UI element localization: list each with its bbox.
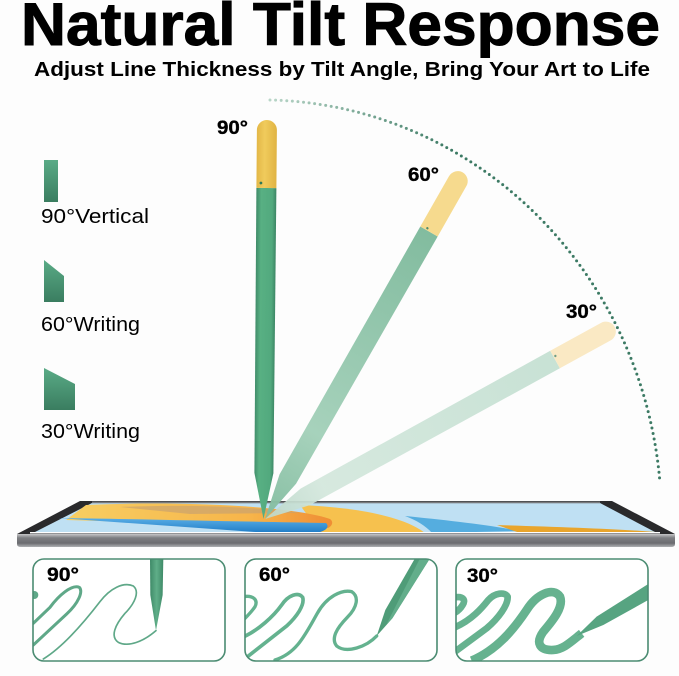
label: 30 writing: 30°Writing [41, 420, 140, 443]
label: 90 vertical: 90°Vertical [41, 205, 149, 228]
label: 90 degrees: 90° [47, 564, 79, 586]
panel: 60 degree stroke sample [243, 558, 437, 661]
angle label 60: 60° [408, 164, 439, 186]
pen at 60 degrees [256, 167, 471, 524]
subtitle: Adjust Line Thickness by Tilt Angle, Bring Your Art to Life [34, 58, 650, 81]
pen at 30 degrees [260, 318, 619, 528]
angle label 90: 90° [217, 117, 248, 139]
icon: 90 degree nib contact [44, 160, 58, 202]
tablet [17, 501, 675, 547]
pen at 90 degrees [254, 120, 277, 519]
dotted angle arc [270, 100, 660, 483]
label: 60 degrees: 60° [259, 564, 290, 586]
legend: nib shapes [41, 160, 149, 443]
panel: 30 degree stroke sample [455, 559, 648, 661]
label: 60 writing: 60°Writing [41, 313, 140, 336]
panel: 90 degree stroke sample [30, 558, 225, 661]
icon: 30 degree nib contact [44, 368, 75, 410]
icon: 60 degree nib contact [44, 260, 64, 302]
label: 30 degrees: 30° [467, 565, 498, 587]
angle label 30: 30° [566, 301, 597, 323]
